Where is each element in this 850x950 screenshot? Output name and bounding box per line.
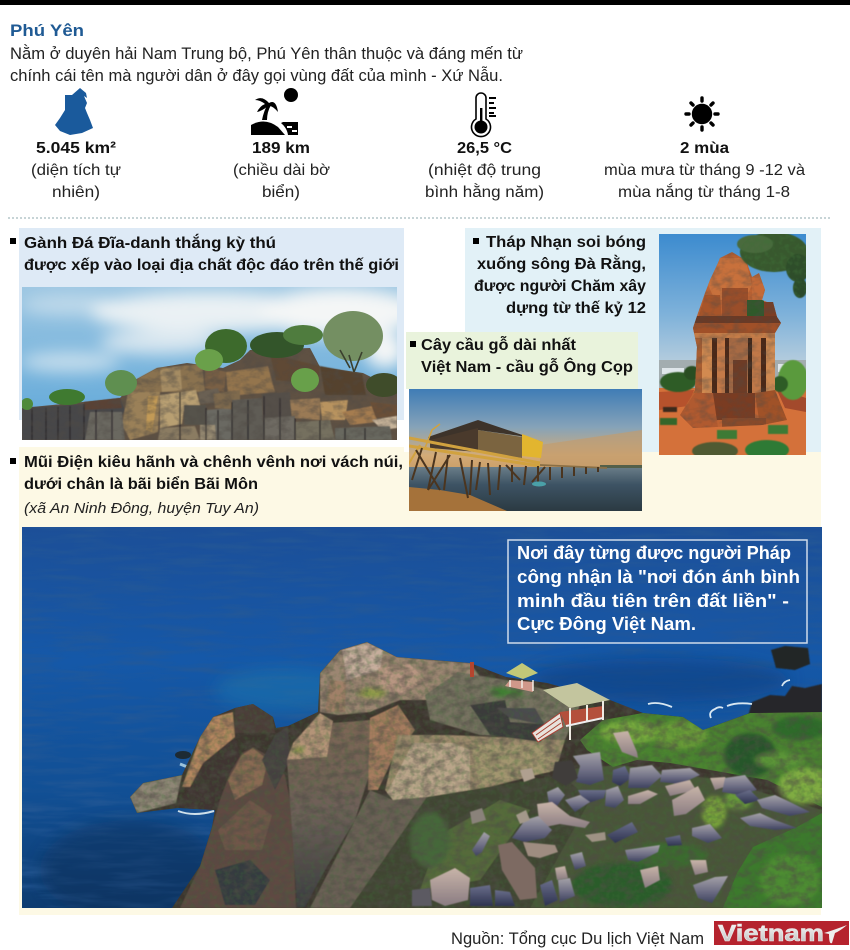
heading: Gành Đá Đĩa: Gành Đá Đĩa-danh thắng kỳ thú bbox=[24, 233, 276, 252]
source: Nguồn: Tổng cục Du lịch Việt Nam bbox=[451, 930, 704, 948]
panel: cream background for Mũi Điện bbox=[19, 447, 821, 915]
heading: bridge bbox=[410, 335, 633, 376]
tree bbox=[736, 234, 806, 299]
heading: Tháp Nhạn bbox=[473, 234, 646, 317]
heading: Mũi Điện: (xã An Ninh Đông, huyện Tuy An) bbox=[24, 500, 259, 517]
stat: seasons: 2 mùa bbox=[680, 140, 729, 157]
sea bbox=[22, 527, 822, 920]
stat: temperature: bình hằng năm) bbox=[425, 182, 544, 201]
stat: seasons: mùa nắng từ tháng 1-8 bbox=[618, 182, 790, 201]
stat: seasons bbox=[604, 98, 805, 201]
large pavilion bbox=[532, 683, 610, 742]
heading: Tháp Nhạn: được người Chăm xây bbox=[474, 278, 646, 295]
callout: công nhận là "nơi đón ánh bình bbox=[517, 567, 800, 587]
stat: coastline: 189 km bbox=[252, 140, 310, 157]
stat: temperature: 26,5 °C bbox=[457, 140, 512, 157]
heading: Tháp Nhạn: xuống sông Đà Rằng, bbox=[477, 254, 646, 273]
panel: green background for bridge heading bbox=[406, 332, 638, 389]
heading: Mũi Điện: Mũi Điện kiêu hãnh và chênh vênh nơi vách núi, bbox=[24, 454, 403, 471]
callout: Nơi đây từng được người Pháp bbox=[517, 543, 791, 563]
heading: Mũi Điện bbox=[10, 454, 403, 517]
intro text: chính cái tên mà người dân ở đây gọi vùng đất của mình - Xứ Nẫu. bbox=[10, 66, 503, 85]
stat: temperature bbox=[425, 93, 544, 201]
stat: area: (diện tích tự bbox=[31, 162, 121, 179]
pavilions bbox=[470, 662, 610, 742]
stat: coastline bbox=[233, 88, 331, 201]
boulders bbox=[412, 731, 810, 906]
heading: bridge: Việt Nam - cầu gỗ Ông Cọp bbox=[421, 357, 633, 376]
callout bbox=[508, 540, 807, 643]
logo: Vietnam+: Vietnam bbox=[718, 920, 824, 946]
photo: Mũi Điện cape bbox=[22, 527, 834, 920]
logo: Vietnam+ bbox=[714, 920, 849, 946]
icon: thermometer bbox=[471, 93, 496, 137]
stat: area bbox=[31, 88, 121, 201]
callout: minh đầu tiên trên đất liền" - bbox=[517, 591, 789, 611]
sea rocks and foam bbox=[175, 646, 822, 814]
heading: Tháp Nhạn: dựng từ thế kỷ 12 bbox=[506, 300, 646, 317]
callout: Cực Đông Việt Nam. bbox=[517, 614, 696, 634]
intro text: Nằm ở duyên hải Nam Trung bộ, Phú Yên thân thuộc và đáng mến từ bbox=[10, 44, 523, 63]
heading: Tháp Nhạn: Tháp Nhạn soi bóng bbox=[486, 234, 646, 251]
stat: coastline: (chiều dài bờ bbox=[233, 162, 331, 179]
stat: area: nhiên) bbox=[52, 184, 100, 201]
tower body bbox=[675, 250, 790, 430]
small pavilion bbox=[505, 663, 538, 692]
icon: sun bbox=[686, 98, 718, 130]
icon: Phú Yên map bbox=[55, 88, 93, 135]
vegetation bbox=[131, 642, 834, 908]
intro text bbox=[10, 44, 523, 85]
panel: blue background for Gành Đá Đĩa bbox=[19, 228, 404, 420]
top black bar bbox=[0, 0, 850, 5]
title: Phú Yên bbox=[10, 21, 84, 40]
photo: Ông Cọp wooden bridge bbox=[405, 389, 642, 511]
panel: light blue background for Tháp Nhạn bbox=[465, 228, 821, 452]
icon: palm beach and sun bbox=[251, 88, 298, 135]
stat: seasons: mùa mưa từ tháng 9 -12 và bbox=[604, 162, 805, 179]
stat: area: 5.045 km² bbox=[36, 140, 116, 157]
photo: Tháp Nhạn tower bbox=[659, 232, 810, 460]
heading: Gành Đá Đĩa bbox=[10, 233, 399, 274]
heading: Mũi Điện: dưới chân là bãi biển Bãi Môn bbox=[24, 475, 258, 493]
rock cliffs bbox=[130, 642, 822, 908]
stat: coastline: biển) bbox=[262, 183, 300, 201]
heading: Gành Đá Đĩa: được xếp vào loại địa chất độc đáo trên thế giới bbox=[24, 257, 399, 274]
heading: bridge: Cây cầu gỗ dài nhất bbox=[421, 335, 577, 354]
photo: Gành Đá Đĩa basalt columns bbox=[20, 287, 420, 440]
stat: temperature: (nhiệt độ trung bbox=[428, 162, 541, 179]
land base bbox=[130, 642, 822, 908]
